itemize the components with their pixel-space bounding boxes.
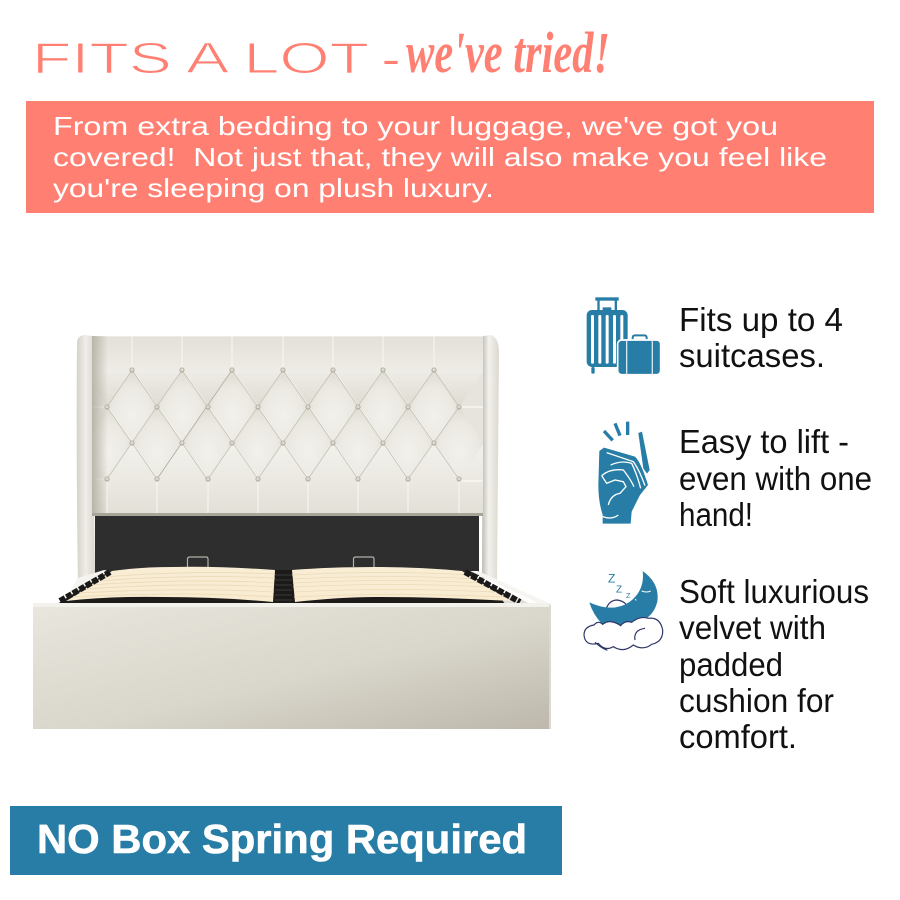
- right slats: [292, 567, 511, 602]
- feature text: suitcases: [679, 301, 843, 374]
- side slat ends: [60, 572, 520, 602]
- intro text: From extra bedding to your luggage, we've got you: [53, 111, 778, 141]
- tufting buttons: [104, 367, 462, 482]
- sleeping Z letters: Z: [616, 585, 622, 596]
- bed base: [33, 603, 551, 729]
- icon: hand lifting with a finger: [598, 422, 650, 524]
- lift handles: [188, 557, 374, 567]
- storage well: [57, 571, 524, 604]
- feature text: comfort: padded: [679, 646, 783, 683]
- feature text: easy lift: even with one: [679, 460, 872, 497]
- icon: suitcases: [587, 297, 661, 375]
- callout: no box spring: NO Box Spring Required: [37, 816, 527, 862]
- feature text: suitcases: suitcases.: [679, 337, 825, 374]
- intro text: covered! Not just that, they will also make you feel like: [53, 142, 827, 172]
- feature text: easy lift: Easy to lift -: [679, 423, 849, 460]
- tufted headboard: [92, 336, 483, 516]
- center slat ladder: [275, 570, 292, 604]
- feature text: easy lift: [679, 423, 872, 533]
- feature text: comfort: comfort.: [679, 718, 797, 755]
- feature text: comfort: Soft luxurious: [679, 573, 869, 610]
- headboard wings: [77, 335, 499, 590]
- bed illustration: [33, 335, 551, 729]
- feature text: suitcases: Fits up to 4: [679, 301, 843, 338]
- sleeping Z letters: Z: [626, 591, 631, 600]
- side rails: [66, 570, 551, 604]
- title: we've tried!: [406, 20, 610, 85]
- panel: intro banner: [26, 101, 874, 213]
- dark storage back panel: [95, 516, 479, 576]
- intro text: you're sleeping on plush luxury.: [53, 173, 494, 203]
- sleeping Z letters: [608, 572, 631, 600]
- feature text: easy lift: hand!: [679, 496, 753, 533]
- feature text: comfort: [679, 573, 869, 755]
- left slats: [66, 567, 275, 602]
- feature text: comfort: cushion for: [679, 682, 834, 719]
- callout: no box spring: [10, 806, 562, 875]
- title: FITS A LOT: [32, 34, 369, 83]
- title: -: [382, 38, 400, 82]
- sleeping Z letters: Z: [608, 572, 615, 586]
- icon: sleeping moon on cloud: [584, 571, 663, 650]
- intro text: [53, 111, 827, 203]
- feature text: comfort: velvet with: [679, 609, 826, 646]
- title: [32, 20, 610, 85]
